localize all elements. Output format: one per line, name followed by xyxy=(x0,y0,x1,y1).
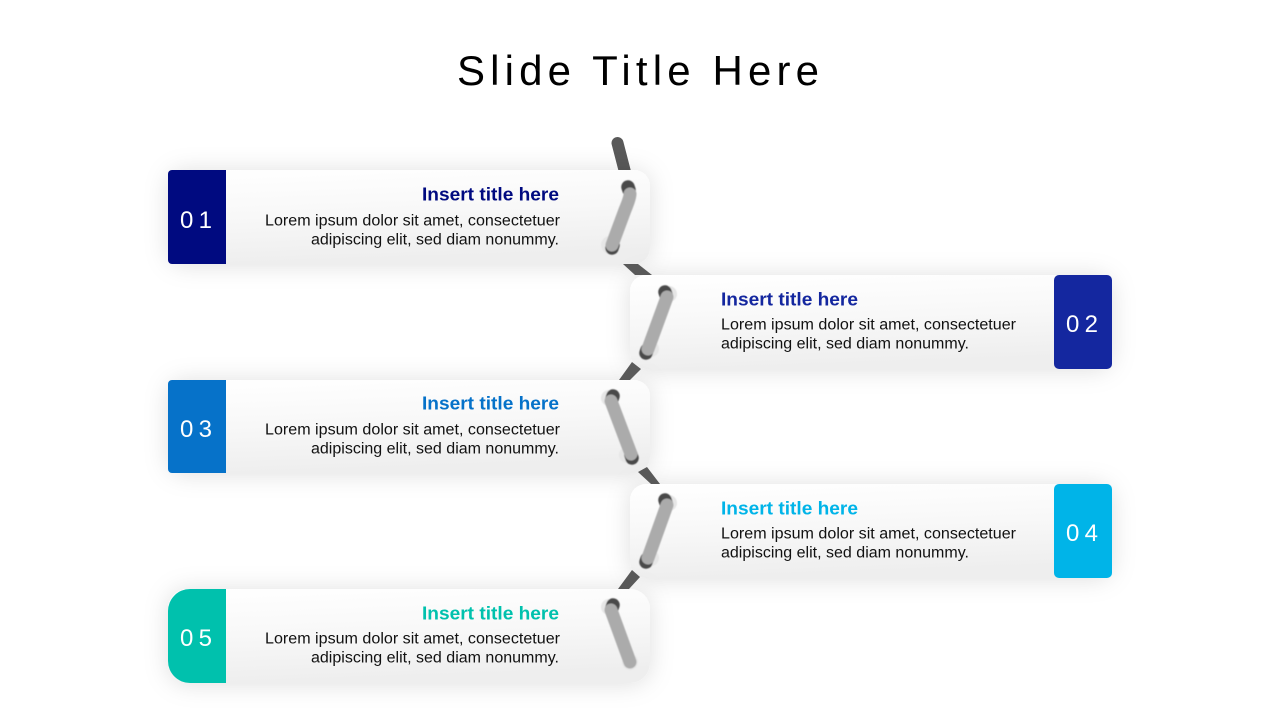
connector: top of line xyxy=(618,143,625,172)
slot 01 xyxy=(601,187,630,254)
body text 02 xyxy=(721,316,1016,352)
slot 03 xyxy=(601,390,635,463)
slot 02 xyxy=(643,286,677,357)
body text 03: adipiscing elit, sed diam nonummy. xyxy=(311,440,559,458)
panel: step 01 xyxy=(168,170,650,264)
body text 01: adipiscing elit, sed diam nonummy. xyxy=(311,232,559,248)
body text 05: Lorem ipsum dolor sit amet, consectetuer xyxy=(265,630,560,648)
body text 02: Lorem ipsum dolor sit amet, consectetuer xyxy=(721,316,1016,334)
tag 05 xyxy=(168,589,226,683)
panel: step 02 xyxy=(630,275,1112,369)
heading 05: Insert title here xyxy=(422,604,559,624)
tag 04: 04 xyxy=(1066,520,1098,547)
body text 04 xyxy=(721,526,1016,562)
tag 01: 01 xyxy=(180,207,212,234)
body text 03 xyxy=(265,422,560,458)
panel: step 03 xyxy=(168,380,650,473)
heading 02: Insert title here xyxy=(721,290,858,310)
title: Slide Title Here xyxy=(457,47,819,94)
tag 02 xyxy=(1054,275,1112,369)
slot 04 xyxy=(643,495,677,566)
heading 04: Insert title here xyxy=(721,498,858,518)
slot 05 xyxy=(601,599,638,670)
body text 01: Lorem ipsum dolor sit amet, consectetuer xyxy=(265,212,560,230)
tag 03 xyxy=(168,380,226,473)
connector: visible line segments between panels xyxy=(618,264,660,589)
tag 01 xyxy=(168,170,226,264)
body text 03: Lorem ipsum dolor sit amet, consectetuer xyxy=(265,422,560,438)
tag 02: 02 xyxy=(1066,311,1098,338)
panel: step 05 xyxy=(168,589,650,683)
panel: step 04 xyxy=(630,484,1112,578)
heading 01: Insert title here xyxy=(422,184,559,204)
body text 04: adipiscing elit, sed diam nonummy. xyxy=(721,544,969,562)
tag 04 xyxy=(1054,484,1112,578)
body text 01 xyxy=(265,212,560,248)
body text 05 xyxy=(265,630,560,666)
body text 04: Lorem ipsum dolor sit amet, consectetuer xyxy=(721,526,1016,542)
body text 05: adipiscing elit, sed diam nonummy. xyxy=(311,650,559,666)
heading 03: Insert title here xyxy=(422,394,559,414)
tag 03: 03 xyxy=(180,416,212,443)
tag 05: 05 xyxy=(180,625,212,652)
body text 02: adipiscing elit, sed diam nonummy. xyxy=(721,336,969,352)
